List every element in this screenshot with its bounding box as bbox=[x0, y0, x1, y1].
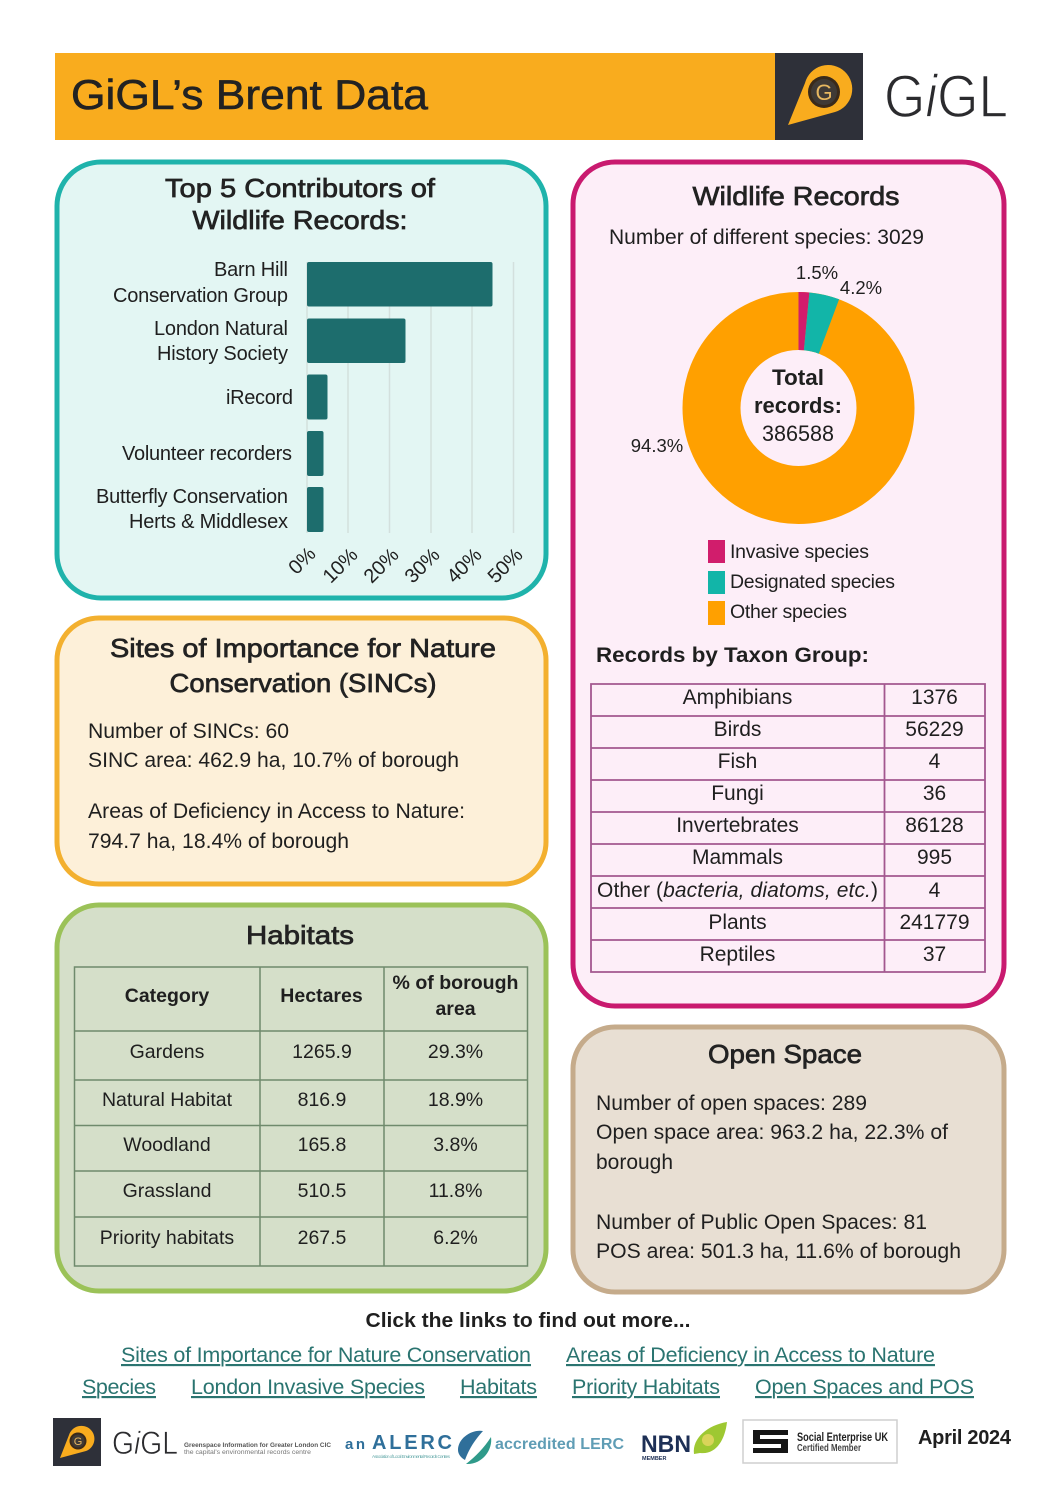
table: taxon groups bbox=[591, 684, 985, 972]
table: habitats: 11.8% bbox=[429, 1180, 482, 1202]
bar chart: contributors: Barn Hill bbox=[214, 259, 288, 281]
bar chart: contributors: 0% bbox=[285, 543, 321, 579]
links heading: Click the links to find out more... bbox=[366, 1309, 690, 1332]
links: London Invasive Species bbox=[191, 1375, 425, 1399]
table: taxon groups: Invertebrates bbox=[676, 814, 799, 837]
table: habitats: 18.9% bbox=[428, 1089, 483, 1111]
table: taxon groups: Plants bbox=[708, 911, 767, 934]
heading: open space: Open Space bbox=[708, 1039, 862, 1069]
footer logo: GiGL: GiGL bbox=[112, 1425, 178, 1461]
footer logo: GiGL: the capital's environmental records centre bbox=[184, 1449, 311, 1456]
bar chart: contributors: Conservation Group bbox=[113, 285, 288, 307]
text: SINC statistics: Areas of Deficiency in Access to Nature: bbox=[88, 800, 465, 823]
table: habitats: Natural Habitat bbox=[102, 1089, 233, 1111]
table: habitats: Gardens bbox=[130, 1041, 205, 1063]
donut chart: records: records: bbox=[754, 393, 842, 418]
table: taxon groups: 56229 bbox=[905, 718, 964, 741]
panel: top 5 contributors bbox=[57, 162, 546, 598]
bar chart: contributors: 10% bbox=[319, 544, 363, 588]
table: habitats: 6.2% bbox=[433, 1227, 478, 1249]
footer logo: ALERC accredited: accredited LERC bbox=[495, 1436, 624, 1453]
table: taxon groups: 1376 bbox=[911, 686, 958, 709]
text: open space statistics: borough bbox=[596, 1151, 673, 1174]
legend: Other species bbox=[730, 601, 847, 623]
text: SINC statistics: Number of SINCs: 60 bbox=[88, 720, 289, 743]
table: habitats: Category bbox=[125, 985, 209, 1007]
bar chart: contributors: 40% bbox=[443, 544, 487, 588]
text: SINC statistics: SINC area: 462.9 ha, 10.7% of borough bbox=[88, 749, 459, 772]
footer logo: Social Enterprise UK bbox=[743, 1420, 897, 1463]
footer logo: GiGL: G bbox=[74, 1436, 82, 1448]
text: number of species: Number of different species: 3029 bbox=[609, 226, 924, 249]
table: taxon groups: 36 bbox=[923, 782, 946, 805]
bar chart: contributors: Herts & Middlesex bbox=[129, 511, 288, 533]
table: taxon groups: Reptiles bbox=[700, 943, 775, 966]
heading: SINCs: Conservation (SINCs) bbox=[170, 668, 436, 698]
table: habitats: % of borough bbox=[392, 972, 518, 994]
text: open space statistics: Open space area: 963.2 ha, 22.3% of bbox=[596, 1121, 948, 1144]
links: Sites of Importance for Nature Conservation bbox=[121, 1343, 531, 1367]
table: habitats: 165.8 bbox=[298, 1134, 346, 1156]
table: taxon groups: Fungi bbox=[711, 782, 764, 805]
table: habitats: 3.8% bbox=[433, 1134, 478, 1156]
footer logo: NBN member bbox=[641, 1422, 727, 1462]
footer logo: ALERC accredited bbox=[345, 1431, 624, 1464]
heading: SINCs: Sites of Importance for Nature bbox=[110, 633, 496, 663]
footer logo: NBN member: NBN bbox=[641, 1431, 691, 1458]
heading: habitats: Habitats bbox=[246, 920, 354, 950]
bar chart: contributors: Volunteer recorders bbox=[122, 443, 292, 465]
footer logo: ALERC accredited: an bbox=[345, 1436, 365, 1453]
text: open space statistics: Number of Public Open Spaces: 81 bbox=[596, 1211, 927, 1234]
donut chart: records: 94.3% bbox=[631, 435, 683, 456]
panel: habitats bbox=[57, 905, 546, 1291]
heading: top 5 contributors: Top 5 Contributors of bbox=[165, 173, 436, 203]
bar chart: contributors: 20% bbox=[360, 544, 404, 588]
panel: open space bbox=[573, 1027, 1004, 1292]
heading: top 5 contributors: Wildlife Records: bbox=[192, 205, 408, 235]
footer logo: ALERC accredited: ALERC bbox=[372, 1432, 452, 1454]
table: habitats: 510.5 bbox=[298, 1180, 347, 1202]
links bbox=[82, 1343, 974, 1399]
logo: GiGL wordmark: GiGL bbox=[884, 63, 1008, 130]
links: Species bbox=[82, 1375, 156, 1399]
header banner bbox=[55, 53, 775, 140]
bar chart: contributors: 50% bbox=[484, 544, 528, 588]
table: taxon groups: 241779 bbox=[899, 911, 970, 934]
donut chart: records: 386588 bbox=[762, 421, 834, 446]
bar chart: contributors: London Natural bbox=[154, 318, 288, 340]
footer logo: ALERC accredited: Association of Local Environmental Records Centres bbox=[372, 1454, 451, 1459]
table: habitats: area bbox=[435, 998, 476, 1020]
text: SINC statistics bbox=[88, 720, 465, 853]
links: Open Spaces and POS bbox=[755, 1375, 974, 1399]
table: taxon groups: Birds bbox=[714, 718, 761, 741]
heading: records by taxon group: Records by Taxon Group: bbox=[596, 644, 869, 667]
table: taxon groups: 86128 bbox=[905, 814, 964, 837]
heading: top 5 contributors bbox=[165, 173, 436, 235]
text: SINC statistics: 794.7 ha, 18.4% of borough bbox=[88, 830, 349, 853]
table: taxon groups: Other (bacteria, diatoms, etc.) bbox=[597, 879, 878, 902]
text: open space statistics: POS area: 501.3 ha, 11.6% of borough bbox=[596, 1240, 961, 1263]
title: GiGL’s Brent Data bbox=[71, 71, 429, 118]
donut chart: records: 4.2% bbox=[840, 277, 882, 298]
legend: Invasive species bbox=[730, 541, 869, 563]
logo: GiGL map pin on dark square bbox=[775, 53, 863, 140]
footer logo: Social Enterprise UK: Certified Member bbox=[797, 1443, 861, 1454]
table: habitats: 267.5 bbox=[298, 1227, 347, 1249]
bar chart: contributors bbox=[96, 259, 528, 588]
legend bbox=[708, 540, 895, 625]
donut chart: records: Total bbox=[772, 365, 824, 390]
text: open space statistics: Number of open spaces: 289 bbox=[596, 1092, 867, 1115]
bar chart: contributors: History Society bbox=[157, 343, 288, 365]
table: taxon groups: 995 bbox=[917, 846, 952, 869]
bar chart: contributors: 30% bbox=[401, 544, 445, 588]
bar chart: contributors: iRecord bbox=[226, 387, 293, 409]
donut chart: records: 1.5% bbox=[796, 262, 838, 283]
links: Habitats bbox=[460, 1375, 537, 1399]
table: habitats: Grassland bbox=[123, 1180, 211, 1202]
links: Priority Habitats bbox=[572, 1375, 720, 1399]
table: taxon groups: 4 bbox=[929, 879, 941, 902]
table: taxon groups: Mammals bbox=[692, 846, 783, 869]
heading: wildlife records: Wildlife Records bbox=[692, 181, 900, 211]
panel: SINCs bbox=[57, 618, 546, 884]
donut chart: records bbox=[631, 262, 886, 495]
table: habitats: Priority habitats bbox=[100, 1227, 234, 1249]
footer logo: Social Enterprise UK: Social Enterprise UK bbox=[797, 1432, 889, 1444]
bar chart: contributors: Butterfly Conservation bbox=[96, 486, 288, 508]
table: habitats: 29.3% bbox=[428, 1041, 483, 1063]
date: April 2024 bbox=[918, 1427, 1012, 1449]
links: Areas of Deficiency in Access to Nature bbox=[566, 1343, 935, 1367]
table: taxon groups: Amphibians bbox=[683, 686, 792, 709]
table: taxon groups: 4 bbox=[929, 750, 941, 773]
heading: SINCs bbox=[110, 633, 496, 698]
table: habitats: Hectares bbox=[280, 985, 363, 1007]
logo: GiGL map pin on dark square: G bbox=[815, 80, 833, 105]
text: open space statistics bbox=[596, 1092, 961, 1263]
table: habitats: 816.9 bbox=[298, 1089, 346, 1111]
footer logo: GiGL: Greenspace Information for Greater London CIC bbox=[184, 1442, 331, 1449]
table: taxon groups: Fish bbox=[718, 750, 757, 773]
table: habitats bbox=[74, 967, 528, 1266]
table: taxon groups: 37 bbox=[923, 943, 946, 966]
panel: wildlife records bbox=[573, 162, 1004, 1006]
footer logo: NBN member: MEMBER bbox=[642, 1456, 666, 1462]
footer logo: GiGL bbox=[53, 1418, 331, 1466]
table: habitats: Woodland bbox=[123, 1134, 211, 1156]
table: habitats: 1265.9 bbox=[292, 1041, 352, 1063]
legend: Designated species bbox=[730, 571, 895, 593]
